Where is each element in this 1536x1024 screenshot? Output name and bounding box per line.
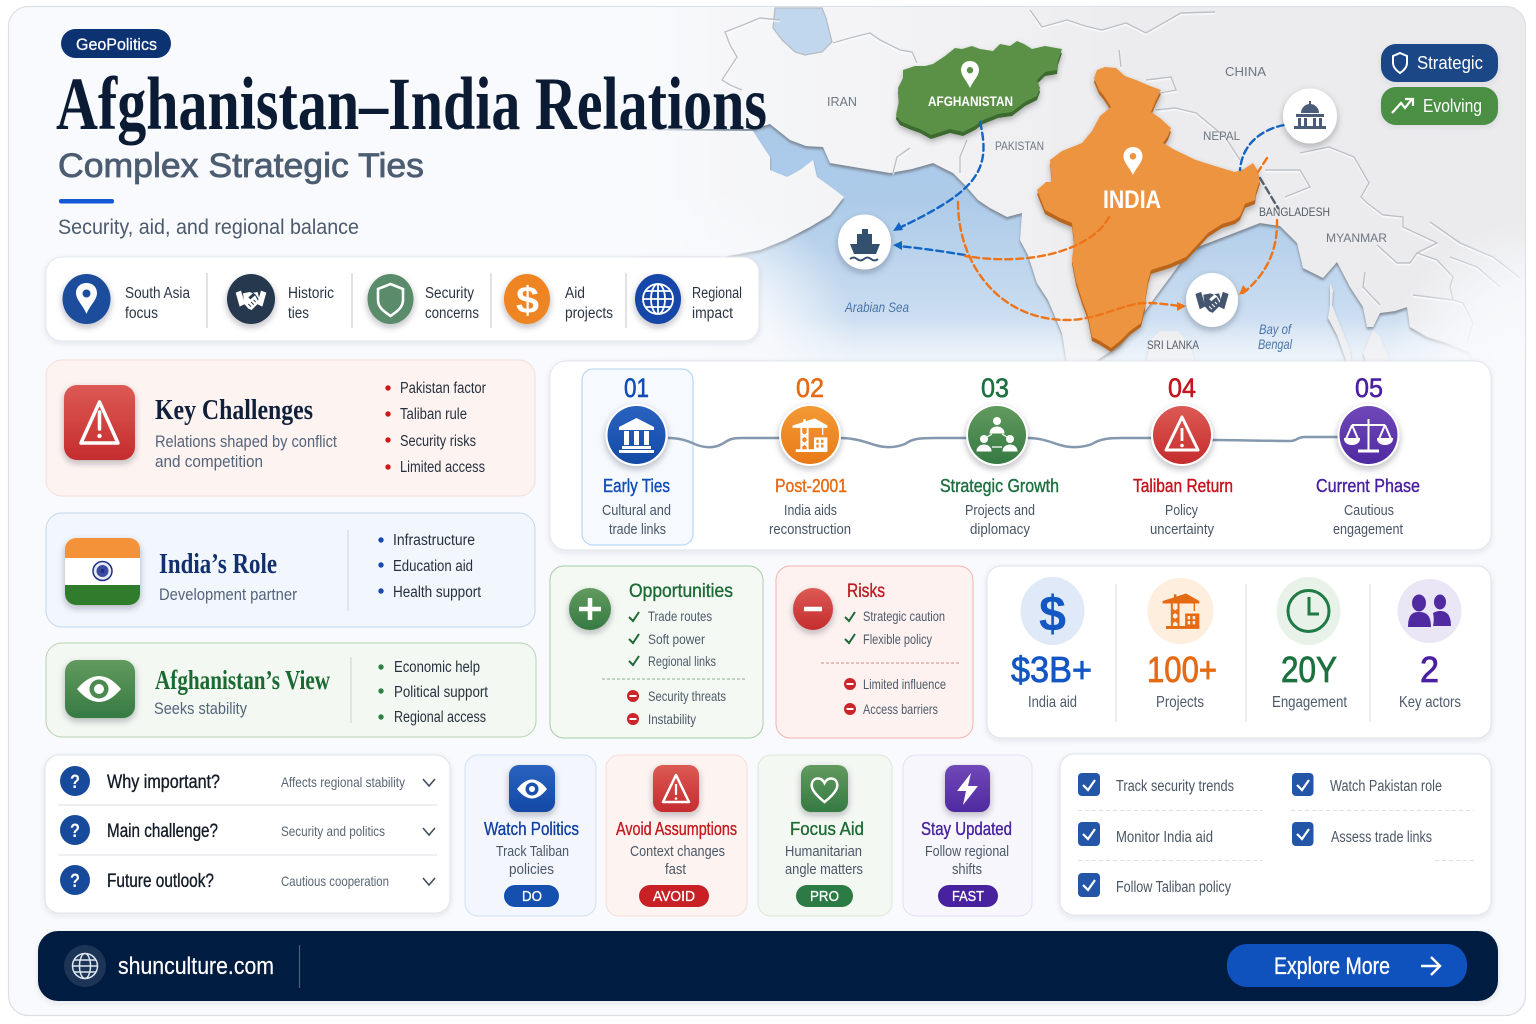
question 2: Security and politics	[281, 823, 385, 839]
bottom-right fade	[1406, 248, 1525, 360]
item: Security concerns	[368, 274, 479, 324]
panel: risks: Flexible policy	[863, 631, 932, 647]
country borders	[722, 10, 1520, 343]
checklist item: Watch Pakistan role	[1330, 778, 1442, 795]
tag: AVOID: AVOID	[653, 888, 695, 905]
bullet list: Regional access	[394, 709, 486, 726]
step 05: engagement	[1333, 521, 1404, 538]
card: watch politics: policies	[509, 861, 554, 878]
card: stay updated: Follow regional	[925, 843, 1009, 860]
button: explore more	[1227, 944, 1467, 987]
step 05: 05	[1355, 373, 1383, 403]
bottom fade	[830, 326, 1455, 360]
Afghanistan pin	[961, 61, 979, 88]
panel: Afghanistan's view: Afghanistan’s View	[155, 665, 330, 695]
icon: warning	[64, 385, 135, 460]
category pill	[61, 29, 171, 58]
question 1: Affects regional stability	[281, 774, 405, 790]
risk items	[844, 676, 946, 717]
tagline: Security, aid, and regional balance	[58, 216, 359, 239]
checklist item	[1078, 873, 1231, 897]
step 02: reconstruction	[769, 521, 851, 538]
panel: India's role	[46, 513, 535, 627]
bullet list: Taliban rule	[400, 406, 467, 423]
icon: heart	[801, 765, 848, 812]
item: South Asia focus: South Asia	[125, 285, 190, 302]
subtitle: Complex Strategic Ties	[58, 147, 424, 185]
panel: India's role: India’s Role	[159, 549, 277, 580]
item: Historic ties	[227, 274, 334, 324]
map labels: PAKISTAN	[995, 139, 1044, 153]
button: explore more: Explore More	[1274, 953, 1390, 980]
stat: projects: Projects	[1156, 694, 1204, 711]
icon: globe	[64, 945, 106, 987]
land mass	[600, 0, 1536, 365]
step 05: Cautious	[1344, 502, 1394, 519]
card: stay updated: shifts	[952, 861, 982, 878]
icon: plus	[569, 588, 611, 630]
opportunity risks: Instability	[648, 711, 696, 727]
sea labels: Bay of	[1259, 321, 1293, 337]
question 2	[60, 815, 435, 845]
risk items: Limited influence	[863, 676, 946, 692]
opportunity risks: Security threats	[648, 688, 726, 704]
step 03: Projects and	[965, 502, 1035, 519]
item: Aid projects: Aid	[565, 285, 585, 302]
stat: engagement: Engagement	[1272, 694, 1347, 711]
card: avoid assumptions: fast	[665, 861, 687, 878]
question 2: Main challenge?	[107, 821, 218, 842]
stat: India aid: $	[1039, 586, 1066, 642]
card: watch politics	[465, 755, 596, 916]
bullet list: Security risks	[400, 433, 476, 450]
card: avoid assumptions: Avoid Assumptions	[616, 819, 737, 839]
card: avoid assumptions	[606, 755, 747, 916]
bullet list: Education aid	[393, 558, 473, 575]
panel: Afghanistan's view	[46, 643, 536, 737]
panel: opportunities: Opportunities	[629, 581, 733, 602]
badge: Strategic	[1381, 44, 1498, 82]
opportunity checks	[629, 612, 639, 665]
panel: opportunities: Soft power	[648, 631, 705, 647]
item: Security concerns: concerns	[425, 305, 479, 322]
step 04: uncertainty	[1150, 521, 1214, 538]
panel: key challenges	[46, 360, 535, 496]
step 03: diplomacy	[970, 521, 1030, 538]
checklist item	[1078, 773, 1234, 796]
opportunity risks	[627, 688, 726, 727]
tag: PRO: PRO	[810, 888, 839, 905]
map labels: SRI LANKA	[1147, 338, 1199, 352]
panel: risks: Strategic caution	[863, 608, 945, 624]
step 02: Post-2001	[775, 476, 847, 496]
question 1: ?	[70, 772, 80, 793]
panel: risks: Risks	[847, 581, 885, 602]
card: focus aid: Humanitarian	[785, 843, 862, 860]
risk checks	[845, 612, 855, 643]
step 01: trade links	[609, 521, 666, 538]
bullet list: Pakistan factor	[400, 380, 486, 397]
route arrows	[897, 122, 1284, 320]
card: focus aid: Focus Aid	[790, 819, 864, 839]
card: focus aid	[758, 755, 892, 916]
map labels	[827, 64, 1387, 352]
checklist item	[1292, 773, 1442, 796]
icon: Indian flag	[65, 538, 140, 605]
bullet list	[385, 380, 486, 476]
step 02: 02	[796, 373, 824, 403]
panel: FAQ	[45, 755, 450, 913]
stat: India aid: India aid	[1028, 694, 1077, 711]
checklist item: Track security trends	[1116, 778, 1234, 795]
item: Aid projects	[504, 274, 613, 324]
map labels: MYANMAR	[1326, 231, 1387, 245]
item: South Asia focus: focus	[125, 305, 158, 322]
highlight card	[582, 369, 693, 545]
item: Aid projects: projects	[565, 305, 613, 322]
step 01: Early Ties	[603, 476, 670, 496]
stat: engagement: 20Y	[1281, 649, 1337, 690]
badge: Evolving	[1381, 87, 1498, 125]
item: Regional impact: impact	[692, 305, 734, 322]
step 03	[940, 373, 1059, 538]
panel: key statistics	[987, 566, 1491, 738]
question 3: Future outlook?	[107, 871, 214, 892]
step 04: Taliban Return	[1133, 476, 1233, 496]
title: Afghanistan–India Relations	[56, 63, 767, 146]
map labels: BANGLADESH	[1259, 205, 1330, 219]
risk items: Access barriers	[863, 701, 938, 717]
icon: minus	[793, 588, 833, 630]
sea labels: Bengal	[1258, 336, 1293, 352]
Afghanistan label: AFGHANISTAN	[928, 93, 1013, 109]
panel: India's role: Development partner	[159, 585, 297, 604]
tag: DO: DO	[522, 888, 542, 905]
item: Regional impact	[635, 274, 742, 324]
step 01: 01	[624, 373, 649, 403]
stat: key actors: 2	[1420, 649, 1439, 690]
question 2: ?	[70, 821, 80, 842]
Arabian sea west fade	[674, 234, 834, 360]
item: Regional impact: Regional	[692, 285, 742, 302]
timeline connector	[668, 437, 1338, 447]
step 04	[1133, 373, 1233, 538]
checklist item: Assess trade links	[1331, 829, 1432, 846]
tag: PRO	[796, 885, 853, 907]
tag: DO	[504, 885, 559, 907]
stat: key actors: Key actors	[1399, 694, 1461, 711]
checklist item: Follow Taliban policy	[1116, 879, 1231, 896]
website: shunculture.com	[118, 953, 274, 980]
step 01: Cultural and	[602, 502, 671, 519]
card: watch politics: Track Taliban	[496, 843, 569, 860]
card: stay updated	[903, 755, 1032, 916]
Afghanistan shape	[896, 41, 1062, 139]
Caspian sea	[773, 8, 832, 55]
stat: key actors	[1398, 579, 1462, 711]
India shape	[1037, 67, 1260, 352]
question 3: ?	[70, 871, 80, 892]
checklist item: Monitor India aid	[1116, 829, 1213, 846]
step 05	[1316, 373, 1420, 538]
sea labels	[844, 299, 1293, 352]
checklist item	[1292, 822, 1432, 846]
question 3	[60, 865, 435, 895]
map labels: CHINA	[1225, 64, 1266, 79]
card: stay updated: Stay Updated	[921, 819, 1012, 839]
icon: parliament building	[1283, 88, 1337, 144]
bullet list: Economic help	[394, 659, 480, 676]
feature strip	[46, 257, 759, 341]
panel: opportunities: Regional links	[648, 653, 716, 669]
sea labels: Arabian Sea	[844, 299, 909, 315]
badge: Strategic: Strategic	[1417, 53, 1483, 73]
bullet list: Health support	[393, 584, 482, 601]
bullet list: Political support	[394, 684, 489, 701]
panel: opportunities	[550, 566, 763, 738]
step 01	[602, 373, 671, 538]
step 03: Strategic Growth	[940, 476, 1059, 496]
bullet list: Infrastructure	[393, 532, 475, 549]
tag: FAST: FAST	[952, 888, 984, 905]
stat: projects: 100+	[1147, 649, 1217, 690]
step 04: 04	[1168, 373, 1196, 403]
icon: ship	[838, 214, 891, 270]
icon: eye	[65, 660, 135, 718]
arrowheads	[893, 222, 1248, 311]
top-left fade	[600, 129, 719, 344]
accent line	[59, 199, 114, 204]
panel: Afghanistan's view: Seeks stability	[154, 699, 247, 718]
bullet list	[378, 532, 482, 601]
question 3: Cautious cooperation	[281, 873, 389, 889]
step 05: Current Phase	[1316, 476, 1420, 496]
India pin	[1124, 147, 1142, 175]
question 1	[60, 766, 435, 796]
step 04: Policy	[1165, 502, 1198, 519]
panel: key challenges: and competition	[155, 452, 263, 471]
card: watch politics: Watch Politics	[484, 819, 579, 839]
card: focus aid: angle matters	[785, 861, 863, 878]
India label: INDIA	[1103, 186, 1161, 214]
step 02	[769, 373, 851, 538]
item: Historic ties: ties	[288, 305, 309, 322]
bullet list	[378, 659, 489, 726]
step 03: 03	[981, 373, 1009, 403]
bullet list: Limited access	[400, 459, 485, 476]
item: Historic ties: Historic	[288, 285, 334, 302]
panel: key challenges: Key Challenges	[155, 395, 313, 426]
tag: FAST	[938, 885, 998, 907]
stat: projects	[1147, 578, 1217, 711]
question 1: Why important?	[107, 772, 220, 793]
map labels: IRAN	[827, 94, 857, 109]
panel: checklist	[1060, 754, 1491, 915]
item: South Asia focus	[62, 274, 190, 324]
tag: AVOID	[639, 885, 709, 907]
stat: India aid	[1011, 577, 1092, 711]
item: Aid projects: $	[516, 280, 539, 322]
stat: India aid: $3B+	[1011, 649, 1092, 690]
panel: opportunities: Trade routes	[648, 608, 712, 624]
map labels: NEPAL	[1203, 129, 1240, 143]
map: South Asia	[644, 7, 1525, 360]
checklist item	[1078, 822, 1213, 846]
panel: timeline	[550, 361, 1491, 550]
icon: lightning	[945, 765, 990, 812]
icon: warning	[653, 765, 699, 812]
footer bar	[38, 931, 1498, 1001]
category pill: GeoPolitics	[76, 35, 157, 54]
icon: eye	[509, 765, 555, 812]
badge: Evolving: Evolving	[1423, 96, 1482, 116]
card: avoid assumptions: Context changes	[630, 843, 725, 860]
icon: handshake	[1186, 273, 1238, 327]
step 02: India aids	[784, 502, 837, 519]
item: Security concerns: Security	[425, 285, 474, 302]
panel: key challenges: Relations shaped by conflict	[155, 432, 337, 451]
stat: engagement	[1272, 577, 1347, 711]
panel: risks	[776, 566, 973, 738]
